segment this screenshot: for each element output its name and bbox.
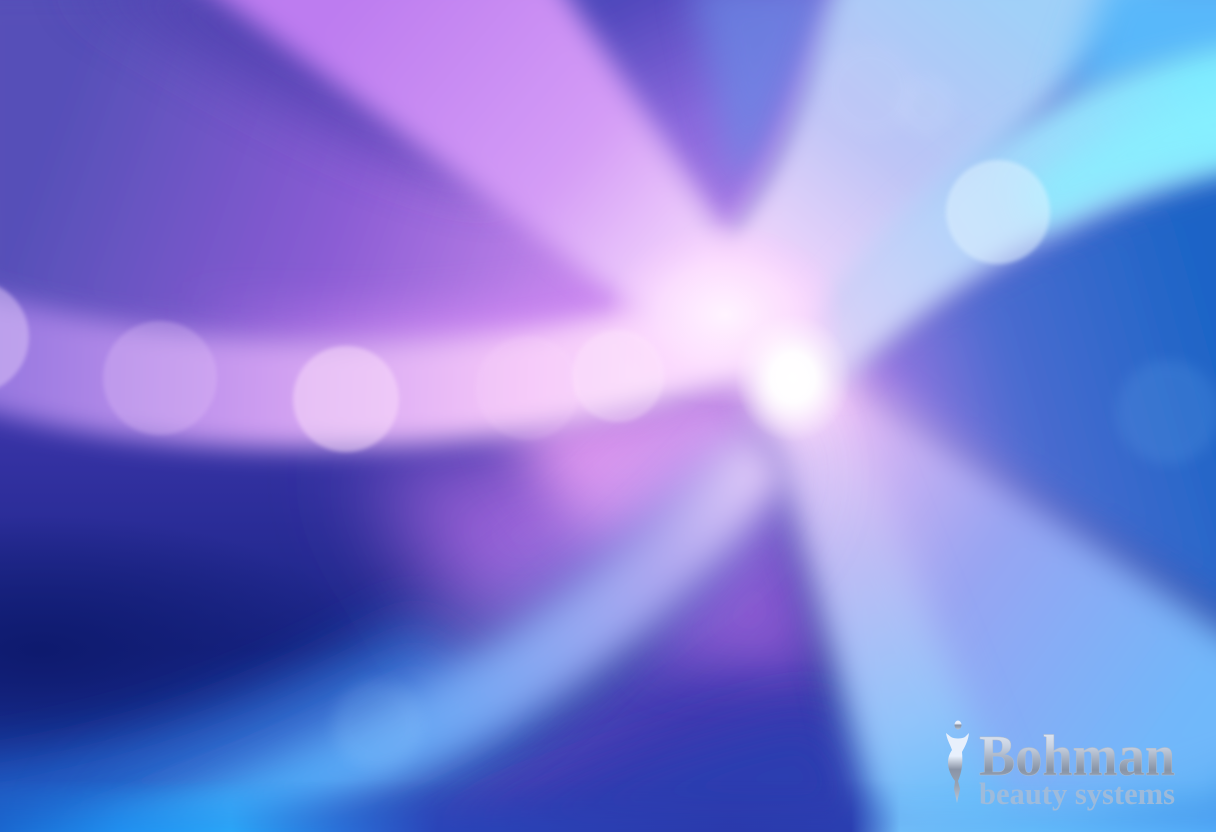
bottom edge colour continuation	[0, 790, 1216, 832]
beam: curved band left	[0, 280, 790, 448]
beam: lower curved band	[40, 430, 790, 832]
logo tagline: beauty systems	[979, 776, 1175, 811]
logo: Bohman beauty systems	[946, 720, 1175, 811]
upper right corner blue	[1060, 0, 1216, 110]
panel: bottom right corner blue	[980, 680, 1216, 832]
beam: lower right	[755, 370, 1020, 832]
blue glow along bottom left	[0, 620, 520, 832]
beam: lower curved band glow	[60, 420, 790, 832]
centre star bridge	[690, 270, 830, 430]
top middle purple wedge	[530, 0, 850, 250]
dark navy lower-left shade	[0, 515, 370, 785]
upper-left purple sweep	[0, 0, 700, 359]
logo wordmark: Bohman	[979, 723, 1175, 788]
centre bright core	[735, 314, 851, 442]
panel: right blue wedge	[820, 150, 1216, 640]
beam: cyan curved band	[790, 40, 1216, 390]
purple glow below left band	[360, 370, 780, 650]
beam: top pink	[185, 0, 770, 350]
beam: upper right pale	[700, 0, 1200, 350]
beam: right	[780, 370, 1216, 832]
bottom centre purple wedge	[380, 470, 860, 832]
icon: female figure	[946, 720, 969, 803]
centre haze	[605, 223, 845, 407]
